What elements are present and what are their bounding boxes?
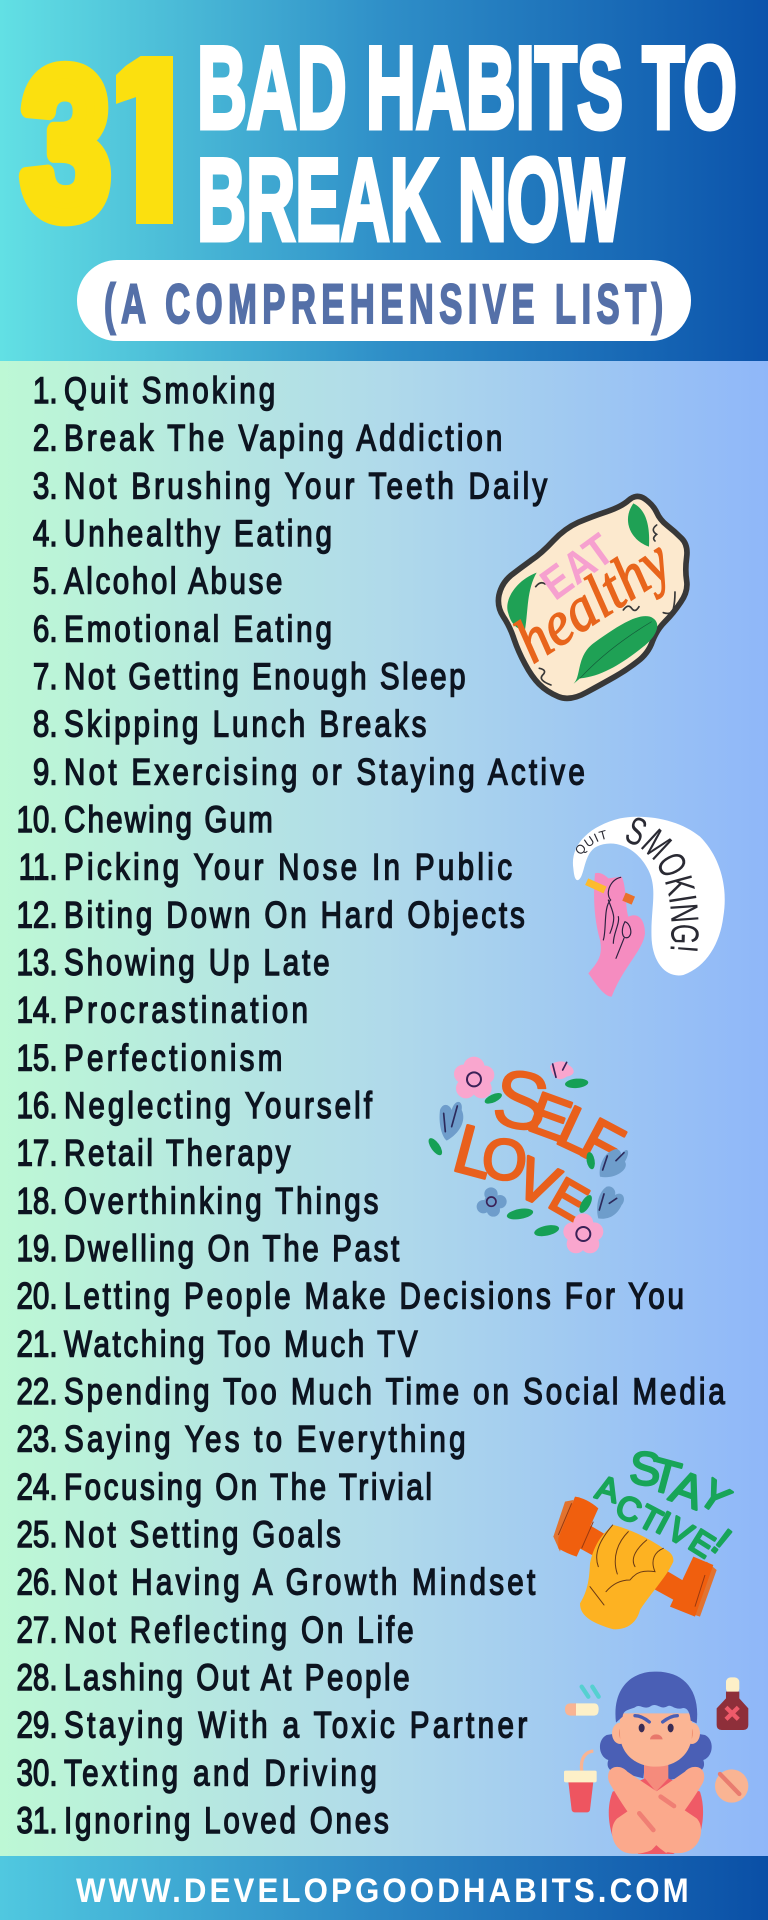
flower: small pink	[550, 1061, 574, 1079]
item 30: 30.	[16, 1753, 58, 1794]
squiggles	[536, 525, 675, 685]
facial features	[635, 1716, 677, 1739]
item 5: Alcohol Abuse	[64, 562, 282, 603]
icon: drink cup	[564, 1751, 597, 1812]
item 30: Texting and Driving	[64, 1753, 377, 1794]
item 7: Not Getting Enough Sleep	[64, 657, 466, 698]
label: ACTIVE!: !	[704, 1522, 739, 1562]
number 31	[18, 56, 173, 226]
tulips: blue	[440, 1102, 628, 1219]
label: LOVE: E	[540, 1167, 597, 1232]
item 15: 15.	[16, 1038, 58, 1079]
item 27: Not Reflecting On Life	[64, 1610, 414, 1651]
label: ACTIVE!: E	[682, 1523, 721, 1566]
item 7: 7.	[33, 657, 58, 698]
item 11: Picking Your Nose In Public	[64, 848, 512, 889]
leaves	[426, 1078, 596, 1238]
dumbbell	[553, 1497, 717, 1617]
item 26: Not Having A Growth Mindset	[64, 1563, 536, 1604]
flower: blue	[477, 1187, 507, 1217]
label: SMOKING!: SMOKING!	[626, 818, 699, 951]
item 31: 31.	[16, 1801, 58, 1842]
item 19: 19.	[16, 1229, 58, 1270]
hair top	[615, 1672, 697, 1723]
item 14: Procrastination	[64, 991, 308, 1032]
item 25: Not Setting Goals	[64, 1515, 341, 1556]
crossed arms	[608, 1767, 704, 1854]
side hair	[600, 1733, 712, 1780]
icon: pill	[715, 1769, 748, 1803]
list of habits	[16, 371, 725, 1842]
label: ACTIVE!: C	[610, 1488, 646, 1531]
item 1: Quit Smoking	[64, 371, 275, 412]
item 19: Dwelling On The Past	[64, 1229, 400, 1270]
label: ACTIVE!: A	[592, 1469, 624, 1511]
neck	[644, 1763, 668, 1792]
label: STAY: A	[664, 1460, 712, 1520]
icon: cigarette with smoke	[565, 1687, 599, 1716]
item 3: Not Brushing Your Teeth Daily	[64, 466, 547, 507]
item 24: 24.	[16, 1467, 58, 1508]
label: LOVE: O	[480, 1127, 530, 1194]
label: SELF: S	[486, 1051, 556, 1151]
label: LOVE: L	[446, 1110, 502, 1194]
item 17: Retail Therapy	[64, 1134, 291, 1175]
item 20: 20.	[16, 1277, 58, 1318]
label: SELF: L	[548, 1093, 606, 1168]
flower: pink bottom	[563, 1213, 603, 1253]
item 28: Lashing Out At People	[64, 1658, 410, 1699]
item 6: 6.	[33, 609, 58, 650]
item 4: Unhealthy Eating	[64, 514, 332, 555]
item 6: Emotional Eating	[64, 609, 332, 650]
label: EAT: EAT	[531, 523, 623, 610]
item 31: Ignoring Loved Ones	[64, 1801, 389, 1842]
item 25: 25.	[16, 1515, 58, 1556]
item 12: Biting Down On Hard Objects	[64, 895, 525, 936]
item 1: 1.	[33, 371, 58, 412]
leaf: bottom	[573, 616, 657, 684]
item 15: Perfectionism	[64, 1038, 282, 1079]
item 8: 8.	[33, 705, 58, 746]
panel: footer background	[0, 1856, 768, 1920]
leaf: top right	[628, 503, 649, 547]
item 17: 17.	[16, 1134, 58, 1175]
subtitle pill: (A COMPREHENSIVE LIST)	[104, 273, 663, 335]
item 22: Spending Too Much Time on Social Media	[64, 1372, 725, 1413]
item 29: 29.	[16, 1706, 58, 1747]
item 4: 4.	[33, 514, 58, 555]
item 13: 13.	[16, 943, 58, 984]
item 22: 22.	[16, 1372, 58, 1413]
fist	[580, 1525, 673, 1629]
label: LOVE: V	[506, 1145, 568, 1220]
title	[197, 22, 737, 265]
illustration: girl refusing bad habits	[564, 1672, 748, 1854]
number 31: 1	[112, 28, 228, 260]
item 11: 11.	[19, 848, 58, 889]
item 3: 3.	[33, 466, 58, 507]
number 31: 3	[22, 28, 110, 260]
item 16: 16.	[16, 1086, 58, 1127]
panel: header background	[0, 0, 768, 361]
label: healthy: healthy	[502, 524, 684, 676]
sticker: eat healthy	[498, 496, 687, 698]
ears	[612, 1723, 700, 1744]
item 20: Letting People Make Decisions For You	[64, 1277, 684, 1318]
item 10: 10.	[16, 800, 58, 841]
item 28: 28.	[16, 1658, 58, 1699]
label: ACTIVE!: V	[661, 1511, 699, 1554]
item 23: Saying Yes to Everything	[64, 1420, 466, 1461]
item 14: 14.	[16, 991, 58, 1032]
item 2: 2.	[33, 419, 58, 460]
leaf: left	[507, 573, 537, 630]
item 24: Focusing On The Trivial	[64, 1467, 432, 1508]
item 8: Skipping Lunch Breaks	[64, 705, 426, 746]
item 2: Break The Vaping Addiction	[64, 419, 502, 460]
item 18: 18.	[16, 1181, 58, 1222]
hand	[588, 873, 645, 997]
label: ACTIVE!: T	[632, 1498, 668, 1541]
label: SELF: E	[521, 1080, 579, 1154]
item 29: Staying With a Toxic Partner	[64, 1706, 527, 1747]
item 21: Watching Too Much TV	[64, 1324, 418, 1365]
label: STAY: S	[627, 1441, 663, 1496]
footer url: WWW.DEVELOPGOODHABITS.COM	[76, 1871, 689, 1909]
label: QUIT: QUIT	[576, 830, 606, 854]
item 9: 9.	[33, 752, 58, 793]
item 16: Neglecting Yourself	[64, 1086, 373, 1127]
flower: pink top	[454, 1057, 494, 1098]
sticker: self love	[426, 1051, 634, 1253]
item 18: Overthinking Things	[64, 1181, 378, 1222]
item 27: 27.	[16, 1610, 58, 1651]
item 13: Showing Up Late	[64, 943, 330, 984]
cigarette	[587, 882, 633, 901]
item 9: Not Exercising or Staying Active	[64, 752, 585, 793]
item 21: 21.	[16, 1324, 58, 1365]
label: ACTIVE!: I	[650, 1505, 676, 1542]
sticker: stay active	[553, 1441, 739, 1629]
label: STAY: T	[645, 1448, 686, 1505]
icon: bottle	[717, 1677, 748, 1730]
face	[620, 1713, 692, 1767]
item 23: 23.	[16, 1420, 58, 1461]
item 26: 26.	[16, 1563, 58, 1604]
item 5: 5.	[33, 562, 58, 603]
item 12: 12.	[16, 895, 58, 936]
label: SELF: F	[571, 1105, 634, 1181]
shirt	[609, 1778, 703, 1854]
panel: list background	[0, 361, 768, 1856]
label: STAY: Y	[691, 1471, 738, 1523]
sticker: quit smoking	[572, 816, 725, 997]
item 10: Chewing Gum	[64, 800, 273, 841]
